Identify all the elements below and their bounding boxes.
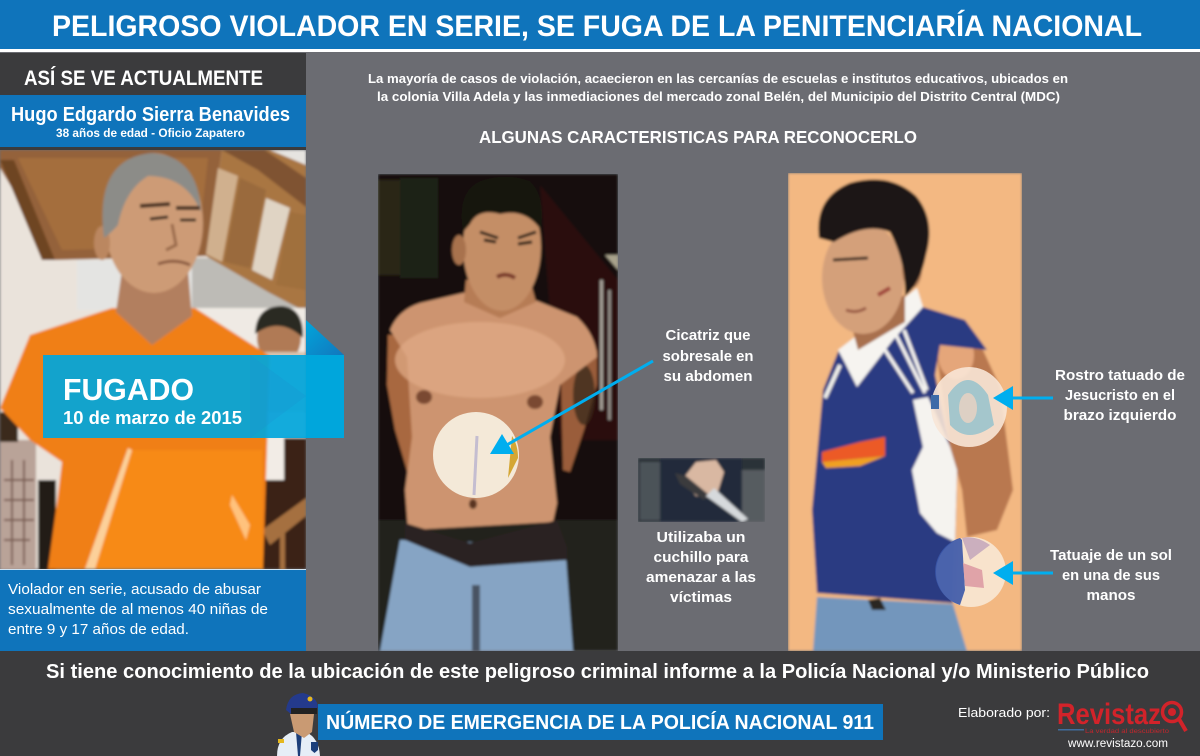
label: sun tattoo bbox=[1050, 548, 1172, 604]
jeans bbox=[380, 540, 573, 651]
title: PELIGROSO VIOLADOR EN SERIE, SE FUGA DE LA PENITENCIARÍA NACIONAL bbox=[52, 9, 1142, 43]
head bbox=[822, 222, 904, 334]
credit: www.revistazo.com bbox=[1067, 738, 1168, 750]
people at lower right bbox=[262, 438, 306, 569]
label: knife bbox=[646, 529, 756, 606]
description text: Violador en serie, acusado de abusar bbox=[8, 581, 261, 598]
intro text: La mayoría de casos de violación, acaecieron en las cercanías de escuelas e institutos educativos, ubicados en bbox=[368, 71, 1068, 86]
shirt stripes bbox=[883, 330, 927, 393]
description text: entre 9 y 17 años de edad. bbox=[8, 621, 189, 638]
name block bbox=[0, 95, 306, 150]
appeal text: Si tiene conocimiento de la ubicación de este peligroso criminal informe a la Policía Nacional y/o Ministerio Público bbox=[46, 661, 1149, 683]
label: Jesus tattoo: brazo izquierdo bbox=[1064, 408, 1177, 424]
arrow: to Jesus tattoo bbox=[993, 386, 1053, 410]
credit: Elaborado por: bbox=[958, 705, 1050, 720]
emergency number bar: NÚMERO DE EMERGENCIA DE LA POLICÍA NACIONAL 911 bbox=[326, 710, 874, 734]
logo: Revistazo: La verdad al descubierto bbox=[1085, 728, 1169, 735]
neck bbox=[116, 270, 192, 345]
neck and head bbox=[464, 280, 536, 318]
label: scar bbox=[662, 328, 754, 385]
photo: side view in blue shirt bbox=[788, 173, 1022, 651]
photo: fugitive in orange uniform bbox=[0, 150, 306, 570]
jeans bbox=[813, 597, 967, 651]
neck bbox=[850, 295, 905, 350]
label: knife: cuchillo para bbox=[654, 549, 749, 566]
label: Jesus tattoo bbox=[1055, 368, 1185, 424]
intro text bbox=[368, 71, 1068, 104]
shirt logo bbox=[822, 437, 885, 462]
footer panel bbox=[0, 651, 1200, 756]
label: Jesus tattoo: Rostro tatuado de bbox=[1055, 368, 1185, 384]
credit bbox=[958, 698, 1186, 750]
background man with cap bbox=[256, 324, 302, 354]
white side panel bbox=[912, 397, 957, 542]
callout: fugado ribbon: FUGADO bbox=[63, 372, 194, 407]
callout: fugado ribbon bbox=[43, 320, 344, 438]
label: sun tattoo: en una de sus bbox=[1062, 568, 1160, 584]
head bbox=[105, 153, 203, 293]
callout: fugado ribbon: 10 de marzo de 2015 bbox=[63, 408, 242, 428]
arrow: to scar bbox=[490, 361, 653, 454]
people at lower left bbox=[0, 440, 36, 570]
name block: 38 años de edad - Oficio Zapatero bbox=[56, 126, 245, 140]
uniform bbox=[0, 308, 270, 569]
section heading: ALGUNAS CARACTERISTICAS PARA RECONOCERLO bbox=[479, 127, 917, 147]
collar bbox=[838, 288, 923, 387]
label: scar: su abdomen bbox=[664, 369, 752, 385]
emergency number bar bbox=[318, 704, 883, 740]
photo: hands holding knife bbox=[638, 458, 765, 522]
label: scar: sobresale en bbox=[662, 349, 754, 365]
title banner bbox=[0, 0, 1200, 52]
torso bbox=[390, 292, 597, 530]
label: Jesus tattoo: Jesucristo en el bbox=[1065, 388, 1175, 404]
panel: current appearance bbox=[0, 53, 306, 651]
description text: sexualmente de al menos 40 niñas de bbox=[8, 601, 268, 618]
label: sun tattoo: Tatuaje de un sol bbox=[1050, 548, 1172, 564]
logo: Revistazo: Revistaz bbox=[1057, 698, 1161, 731]
icon: police officer bbox=[277, 693, 320, 756]
highlight: Jesus tattoo bbox=[931, 367, 1007, 447]
shirt bbox=[812, 307, 987, 603]
arms bbox=[387, 335, 418, 474]
arm bbox=[937, 328, 1013, 537]
label: knife: Utilizaba un bbox=[656, 529, 746, 546]
highlight: abdomen scar bbox=[433, 412, 519, 498]
label: knife: víctimas bbox=[670, 589, 732, 606]
description text bbox=[0, 569, 306, 651]
photo: shirtless front view bbox=[378, 174, 618, 651]
label: knife: amenazar a las bbox=[646, 569, 756, 586]
name block: Hugo Edgardo Sierra Benavides bbox=[11, 104, 290, 126]
intro text: la colonia Villa Adela y las inmediaciones del mercado zonal Belén, del Municipio del Distrito Central (MDC) bbox=[377, 89, 1060, 104]
label: scar: Cicatriz que bbox=[666, 328, 750, 344]
heading: current appearance bbox=[0, 53, 306, 95]
label: sun tattoo: manos bbox=[1086, 588, 1136, 604]
heading: current appearance: ASÍ SE VE ACTUALMENTE bbox=[24, 67, 263, 90]
highlight: sun tattoo bbox=[935, 537, 1006, 607]
arrow: to sun tattoo bbox=[993, 561, 1053, 585]
